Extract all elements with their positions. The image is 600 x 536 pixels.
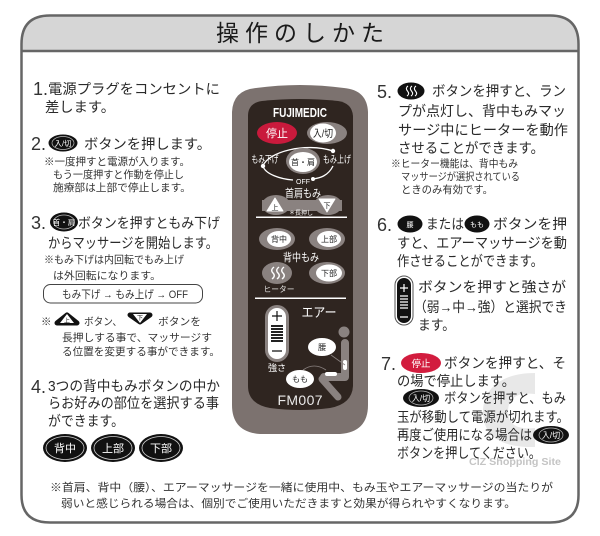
step 5: させることができます。 [398,140,544,157]
icon: back buttons: 上部 [102,442,124,455]
position buttons: 下 [324,202,330,210]
icon: waist button: 腰 [406,221,414,229]
step 3: からマッサージを開始します。 [48,235,218,252]
step 6: ます。 [418,317,455,334]
icon: power button: 入/切 [412,394,430,403]
step 1: 差します。 [45,99,115,116]
watermark: CIZ Shopping Site [469,457,561,468]
step 2: もう一度押すと作動を停止し [53,168,184,181]
icon: down button [130,314,150,323]
note: position buttons: ボタンを [158,316,201,328]
step 4: ができます。 [48,413,124,430]
stop button [257,122,297,144]
brand: FUJIMEDIC [273,105,327,120]
note: position buttons: る位置を変更する事ができます。 [62,345,220,358]
waist button: 腰 [318,343,326,352]
upper button [309,228,345,250]
step 5: ※ヒーター機能は、背中もみ [391,157,518,170]
footer note [50,480,553,510]
step 7: ボタンを押すと、そ [444,355,566,372]
icon: heater button [398,82,424,100]
remote control: エアー [302,305,336,320]
icon: thigh button: もも [470,221,484,229]
icon: neck and shoulder button: 首・肩 [53,217,75,227]
intensity slider [265,305,289,362]
icon: down button: 下 [137,315,143,322]
note: position buttons: ※ [41,316,52,328]
power button [307,122,347,144]
step 4: 4. [31,377,46,397]
icon: waist button [398,216,422,232]
lower button [309,262,345,284]
step 6: または [426,216,464,233]
mode arc [261,148,335,181]
remote control: OFF [296,179,310,186]
thigh button: もも [292,375,308,384]
icon: back buttons: 背中 [54,441,76,455]
step 5 [377,82,568,196]
step 6: （弱→中→強）と選択でき [414,299,567,316]
lower button: 下部 [321,269,337,278]
step 5: 5. [377,82,392,102]
step 5: マッサージが選択されている [401,170,520,183]
model name: FM007 [278,392,323,408]
step 6 [377,215,567,334]
step 3: ※もみ下げは内回転でもみ上げ [44,253,184,266]
step 3: 3. [31,213,46,233]
power button: 入/切 [313,128,333,140]
step 4: らお好みの部位を選択する事 [48,395,219,412]
sequence box: もみ下げ → もみ上げ → OFF [62,288,188,301]
step 1: 電源プラグをコンセントに [48,81,220,98]
footer note: 弱いと感じられる場合は、個別でご使用いただきますと効果が得られやすくなります。 [61,496,516,510]
step 1: 1. [33,79,48,99]
step 6: すと、エアーマッサージを動 [397,235,567,252]
icon: intensity button [395,276,413,325]
remote control: 背中もみ [283,250,319,264]
mode labels: もみ下げ [252,154,278,166]
icon: power button inline: 入/切 [542,431,560,440]
step 7: 再度ご使用になる場合は [397,427,532,444]
icon: neck and shoulder button [50,212,78,232]
icon: up button: 上 [64,317,70,325]
note: position buttons: ボタン、 [84,316,122,328]
heater button [262,262,292,284]
upper button: 上部 [321,235,337,244]
icon: power button [403,389,439,407]
thigh button [286,370,314,388]
icon: stop button [401,353,441,373]
icon: power button [48,134,78,152]
step 2: ※一度押すと電源が入ります。 [44,155,190,168]
step 2 [31,134,211,194]
step 3: は外回転になります。 [53,270,161,282]
panel header [22,16,578,51]
watermark [469,373,561,468]
remote control [232,85,368,434]
neck and shoulder button: 首・肩 [291,157,315,167]
icon: power button: 入/切 [54,139,72,148]
neck and shoulder button [286,148,320,174]
step 2: 施療部は上部で停止します。 [53,181,191,194]
step 1 [33,79,220,116]
step 6: 作させることができます。 [397,253,543,270]
step 7 [381,353,569,462]
position buttons [262,195,342,217]
title: 操作のしかた [216,20,384,46]
waist button [308,338,336,356]
position buttons: ＊長押し [289,209,313,217]
icon: thigh button [464,216,490,232]
step 2: ボタンを押します。 [84,136,211,153]
step 6: ボタンを押すと強さが [418,279,566,296]
step 6: ボタンを押 [493,216,567,233]
stop button: 停止 [266,127,288,140]
remote face [248,99,353,410]
step 4: 3つの背中もみボタンの中か [48,378,220,395]
step 7: 玉が移動して電源が切れます。 [397,409,569,426]
step 7: 7. [381,354,396,374]
step 4 [31,377,220,462]
step 2: 2. [31,134,46,154]
step 6: 6. [377,215,392,235]
back button: 背中 [271,234,287,244]
step 5: プが点灯し、背中もみマッ [398,103,566,120]
remote control: 首肩もみ [285,186,321,200]
remote body [232,85,368,434]
position buttons: 上 [272,203,278,212]
icon: up button [57,314,77,325]
step 7: ボタンを押すと、もみ [444,390,566,407]
step 5: ボタンを押すと、ラン [432,83,566,100]
note: position buttons: 長押しする事で、マッサージす [62,331,212,344]
remote control: もみ上げ [323,154,351,166]
footer note: ※首肩、背中（腰）、エアーマッサージを一緒に使用中、もみ玉やエアーマッサージの当たりが [50,480,553,494]
sequence box [44,284,202,303]
step 3 [31,212,220,358]
step 5: ときのみ有効です。 [401,183,493,196]
step 3: ボタンを押すともみ下げ [78,215,220,232]
remote control: 強さ [268,362,286,373]
step 7: の場で停止します。 [397,373,515,390]
icon: back buttons [43,434,183,462]
remote control: ヒーター [264,285,294,294]
step 7: ボタンを押してください。 [397,445,541,462]
icon: stop button: 停止 [411,358,431,370]
back button [259,228,295,250]
icon: back buttons: 下部 [150,442,172,455]
step 5: サージ中にヒーターを動作 [398,122,568,139]
note: position buttons [41,314,220,358]
icon: power button inline [533,426,569,444]
seated figure [303,326,350,397]
